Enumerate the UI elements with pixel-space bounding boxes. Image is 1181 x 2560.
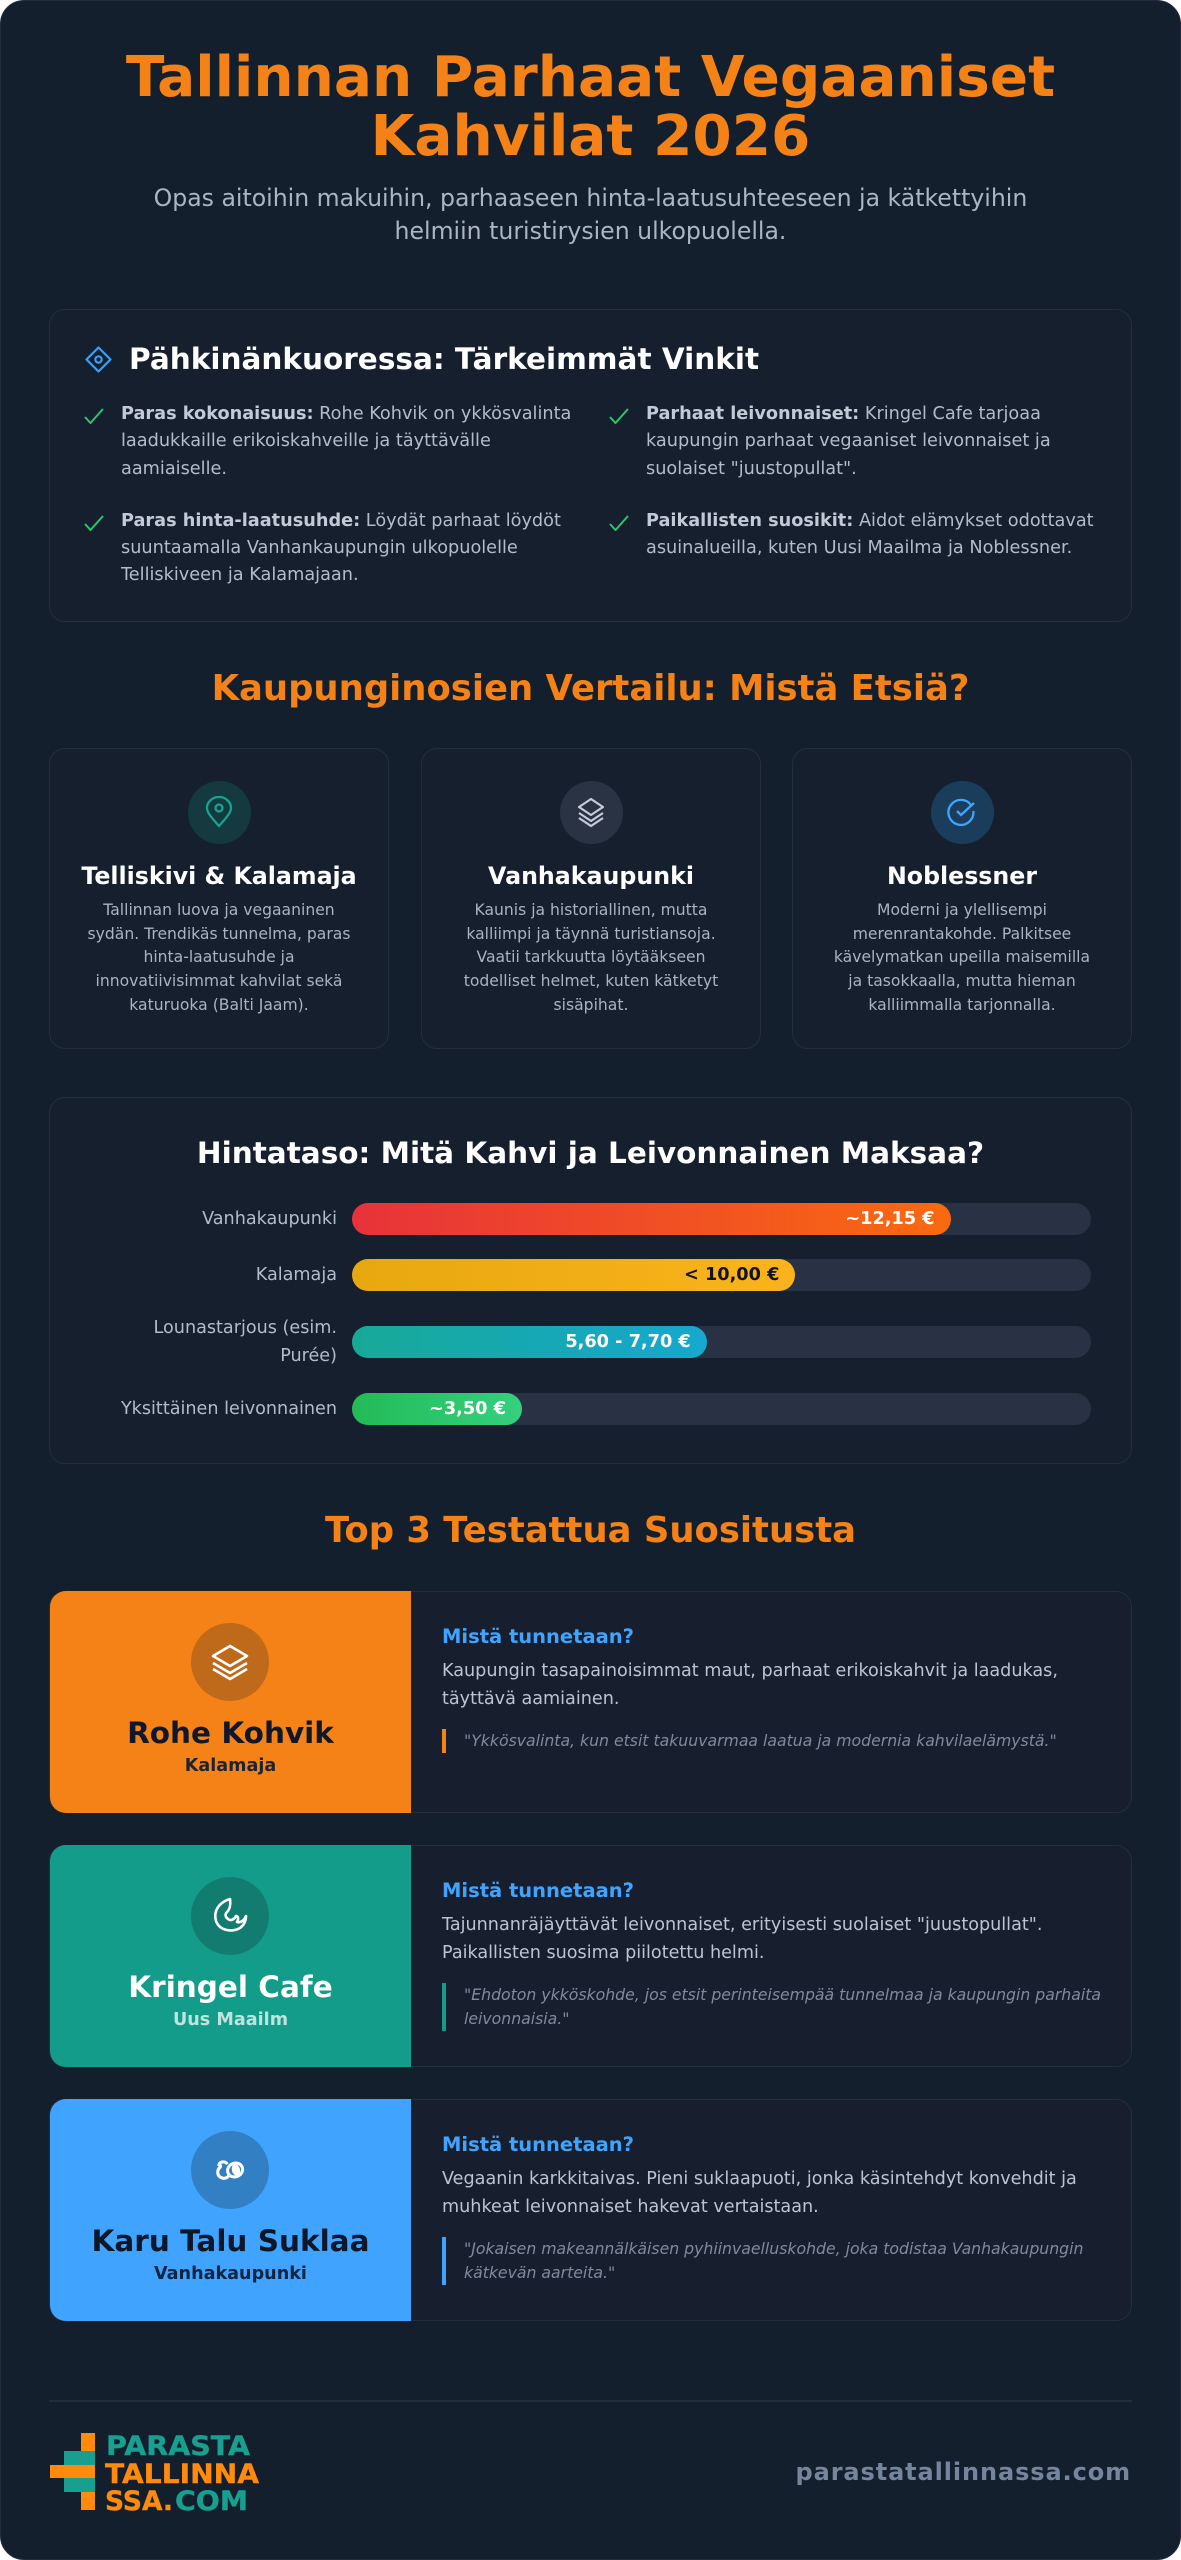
subtitle [154, 184, 1027, 245]
logo wordmark [105, 2431, 259, 2517]
district description [88, 901, 350, 1014]
district description: kalliimmalla tarjonnalla. [868, 996, 1056, 1014]
quote: "Ykkösvalinta, kun etsit takuuvarmaa laatua ja modernia kahvilaelämystä." [464, 1731, 1057, 1750]
logo [50, 2431, 260, 2514]
district description: Vaatii tarkkuutta löytääkseen [476, 948, 706, 966]
description: täyttävä aamiainen. [442, 1688, 619, 1708]
icon: layers [191, 1623, 269, 1701]
subtitle: helmiin turistirysien ulkopuolella. [395, 217, 786, 245]
logo wordmark: PARASTA [106, 2431, 250, 2462]
bar: Yksittäinen leivonnainen [352, 1393, 1091, 1425]
district description: Tallinnan luova ja vegaaninen [103, 901, 335, 919]
heading: district comparison: Kaupunginosien Vertailu: Mistä Etsiä? [212, 668, 969, 709]
district description: ja tasokkaalla, mutta hieman [848, 972, 1076, 990]
tip: paikallisten suosikit: asuinalueilla, kuten Uusi Maailma ja Noblessner. [646, 538, 1072, 558]
Kringel Cafe colour block [50, 1845, 411, 2067]
website url: parastatallinnassa.com [796, 2458, 1131, 2486]
district description [464, 901, 718, 1014]
panel: Karu Talu Suklaa [49, 2099, 1132, 2321]
panel: Kringel Cafe [49, 1845, 1132, 2067]
district description: Kaunis ja historiallinen, mutta [475, 901, 707, 919]
district description: merenrantakohde. Palkitsee [853, 925, 1071, 943]
icon: check circle [930, 781, 994, 844]
district description: Moderni ja ylellisempi [877, 901, 1047, 919]
tip: paikallisten suosikit [646, 510, 1094, 558]
tip: parhaat leivonnaiset: Parhaat leivonnaiset: Kringel Cafe tarjoaa [646, 404, 1041, 424]
tip: paikallisten suosikit: Paikallisten suosikit: Aidot elämykset odottavat [646, 510, 1094, 530]
panel: Vanhakaupunki [421, 748, 761, 1049]
quote bar [442, 1729, 446, 1753]
cafe location: Kalamaja [185, 1756, 276, 1776]
bar: Vanhakaupunki [352, 1203, 1091, 1235]
tip: paras hinta-laatusuhde: Paras hinta-laatusuhde: Löydät parhaat löydöt [121, 510, 561, 530]
bar: Lounastarjous: 5,60 - 7,70 € [565, 1332, 691, 1352]
icon: map pin [188, 781, 250, 844]
quote [464, 2239, 1083, 2282]
quote bar [442, 2237, 446, 2285]
description: Paikallisten suosima piilotettu helmi. [442, 1942, 764, 1962]
tip: paras kokonaisuus: Paras kokonaisuus: Rohe Kohvik on ykkösvalinta [121, 404, 571, 424]
icon: pralines [191, 2131, 269, 2209]
quote: "Jokaisen makeannälkäisen pyhiinvaelluskohde, joka todistaa Vanhakaupungin [464, 2239, 1083, 2258]
district description: sydän. Trendikäs tunnelma, paras [88, 925, 350, 943]
tip: paras hinta-laatusuhde: suuntaamalla Vanhankaupungin ulkopuolelle [121, 538, 518, 558]
icon: check 2 [84, 515, 104, 531]
panel: price chart [49, 1097, 1132, 1464]
district description: todelliset helmet, kuten kätketyt [464, 972, 718, 990]
tip: paras hinta-laatusuhde: Telliskiveen ja Kalamajaan. [121, 565, 359, 585]
label: Vanhakaupunki: Vanhakaupunki [202, 1209, 337, 1229]
icon: check 3 [609, 408, 629, 424]
panel: Rohe Kohvik [49, 1591, 1132, 1813]
district description: innovatiivisimmat kahvilat sekä [96, 972, 342, 990]
cafe name: Rohe Kohvik [127, 1716, 334, 1750]
icon: check 1 [84, 408, 104, 424]
tip: paras kokonaisuus: aamiaiselle. [121, 459, 227, 479]
heading: top 3: Top 3 Testattua Suositusta [325, 1510, 856, 1551]
label: Lounastarjous [154, 1318, 337, 1366]
bar: Kalamaja: < 10,00 € [684, 1265, 779, 1285]
district description: hinta-laatusuhde ja [143, 948, 295, 966]
bar: Vanhakaupunki: ~12,15 € [845, 1209, 935, 1229]
tip: parhaat leivonnaiset: kaupungin parhaat vegaaniset leivonnaiset ja [646, 431, 1051, 451]
district description: kalliimpi ja täynnä turistiansoja. [466, 925, 716, 943]
district name: Telliskivi & Kalamaja [81, 862, 357, 890]
district description [834, 901, 1090, 1014]
tip: paras hinta-laatusuhde [120, 510, 561, 585]
description: Tajunnanräjäyttävät leivonnaiset, erityisesti suolaiset "juustopullat". [442, 1915, 1042, 1935]
cafe location: Uus Maailm [173, 2010, 288, 2030]
Rohe Kohvik colour block [50, 1591, 411, 1813]
icon: layers [560, 781, 622, 844]
subtitle: Opas aitoihin makuihin, parhaaseen hinta-laatusuhteeseen ja kätkettyihin [154, 184, 1027, 212]
description [442, 2169, 1077, 2216]
prompt: Mistä tunnetaan? [442, 1625, 634, 1648]
price heading: Hintataso: Mitä Kahvi ja Leivonnainen Maksaa? [197, 1136, 984, 1170]
logo wordmark: TALLINNA [105, 2459, 259, 2490]
label: Kalamaja: Kalamaja [256, 1265, 337, 1285]
icon: croissant [191, 1877, 269, 1955]
cafe name: Karu Talu Suklaa [92, 2224, 370, 2258]
title: Tallinnan Parhaat Vegaaniset [126, 45, 1055, 110]
icon: check 4 [609, 515, 629, 531]
description: Vegaanin karkkitaivas. Pieni suklaapuoti, jonka käsintehdyt konvehdit ja [442, 2169, 1077, 2189]
tip: parhaat leivonnaiset: suolaiset "juustopullat". [646, 459, 857, 479]
quote: "Ehdoton ykköskohde, jos etsit perinteisempää tunnelmaa ja kaupungin parhaita [464, 1985, 1101, 2004]
cafe location: Vanhakaupunki [154, 2264, 307, 2284]
icon: blue diamond [85, 346, 112, 373]
title: Kahvilat 2026 [371, 104, 810, 169]
district name: Vanhakaupunki [488, 862, 694, 890]
prompt: Mistä tunnetaan? [442, 2133, 634, 2156]
bar: Kalamaja [352, 1259, 1091, 1291]
label: Lounastarjous: Lounastarjous (esim. [154, 1318, 337, 1338]
prompt: Mistä tunnetaan? [442, 1879, 634, 1902]
panel: Telliskivi & Kalamaja [49, 748, 389, 1049]
Karu Talu Suklaa colour block [50, 2099, 411, 2321]
description: Kaupungin tasapainoisimmat maut, parhaat erikoiskahvit ja laadukas, [442, 1661, 1058, 1681]
quote [464, 1985, 1101, 2028]
quote: kätkevän aarteita." [464, 2263, 615, 2282]
tips heading: Pähkinänkuoressa: Tärkeimmät Vinkit [129, 342, 759, 376]
quote bar [442, 1983, 446, 2031]
quote: leivonnaisia." [464, 2009, 569, 2028]
panel: Noblessner [792, 748, 1132, 1049]
district description: sisäpihat. [554, 996, 628, 1014]
description [442, 1915, 1042, 1962]
description [442, 1661, 1058, 1708]
district name: Noblessner [887, 862, 1037, 890]
district description: katuruoka (Balti Jaam). [129, 996, 309, 1014]
label: Lounastarjous: Purée) [280, 1346, 337, 1366]
district description: kävelymatkan upeilla maisemilla [834, 948, 1090, 966]
description: muhkeat leivonnaiset hakevat vertaistaan. [442, 2196, 819, 2216]
panel: key tips [49, 309, 1132, 622]
tip: parhaat leivonnaiset [646, 404, 1051, 479]
bar: Yksittäinen leivonnainen: ~3,50 € [429, 1399, 506, 1419]
label: Yksittäinen leivonnainen: Yksittäinen leivonnainen [121, 1399, 337, 1419]
tip: paras kokonaisuus [121, 404, 571, 479]
cafe name: Kringel Cafe [128, 1970, 333, 2004]
tip: paras kokonaisuus: laadukkaille erikoiskahveille ja täyttävälle [121, 431, 491, 451]
title [126, 45, 1055, 169]
bar: Lounastarjous [352, 1326, 1091, 1358]
logo mark [50, 2433, 95, 2510]
